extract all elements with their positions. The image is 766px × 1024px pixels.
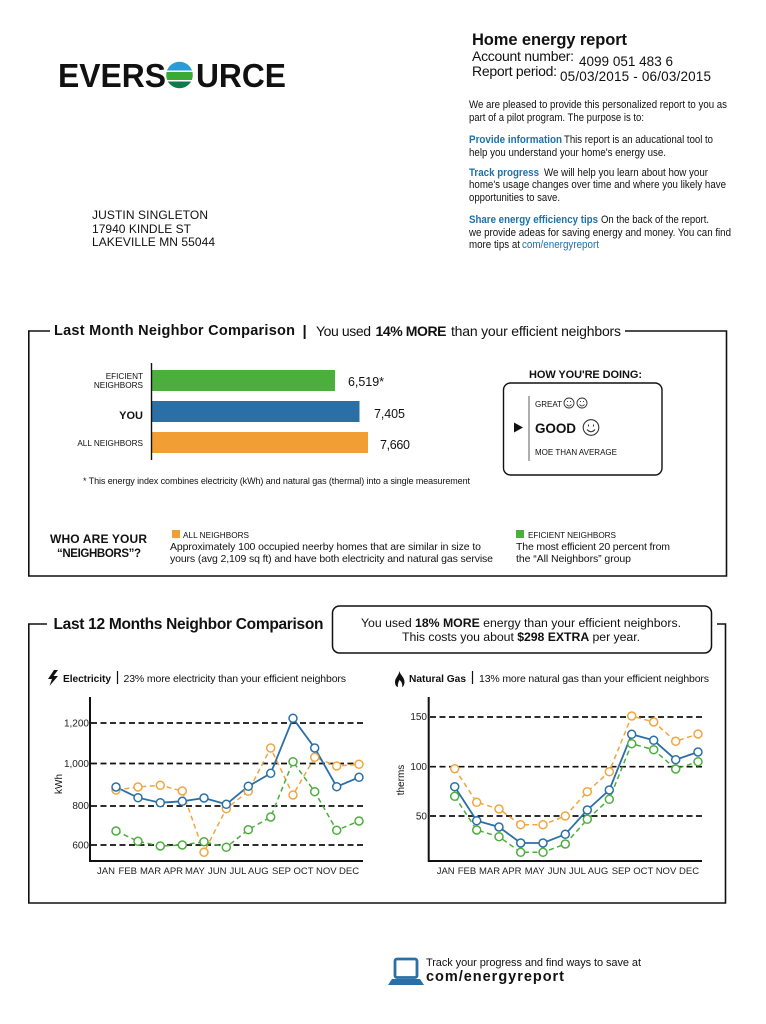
chart: electricity: kWh xyxy=(54,774,65,794)
logo: Eversource: EVERS xyxy=(58,58,166,95)
icon: laptop xyxy=(388,959,424,985)
icon: smileys xyxy=(564,398,599,435)
logo: Eversource xyxy=(60,62,285,88)
bar chart: 7,405 xyxy=(374,407,405,421)
intro text block: part of a pilot program. The purpose is to: xyxy=(469,112,644,124)
chart: natural gas: JUL xyxy=(569,866,586,877)
report header: 05/03/2015 - 06/03/2015 xyxy=(560,69,711,84)
intro text block: home's usage changes over time and where you likely have xyxy=(469,179,726,191)
natural gas heading: Natural Gas xyxy=(409,674,466,685)
electricity heading: 23% more electricity than your efficient neighbors xyxy=(124,673,346,685)
chart: electricity: JUN xyxy=(208,866,227,877)
legend: efficient neighbors: EFICIENT NEIGHBORS xyxy=(528,531,617,540)
footer call to action: Track your progress and find ways to save at xyxy=(426,957,641,969)
chart: natural gas: 150 xyxy=(410,712,427,723)
intro text block: On the back of the report. xyxy=(601,214,709,226)
how you're doing gauge: GREAT xyxy=(535,400,562,409)
customer address: LAKEVILLE MN 55044 xyxy=(92,235,215,249)
how you're doing gauge: HOW YOU'RE DOING: xyxy=(529,369,642,381)
intro text block: we provide adeas for saving energy and money. You can find xyxy=(468,227,731,239)
report header xyxy=(472,31,711,84)
electricity heading: Electricity xyxy=(63,674,111,685)
intro text block: Share energy efficiency tips xyxy=(469,214,598,226)
panel heading: Last Month Neighbor Comparison xyxy=(54,323,295,339)
intro text block: help you understand your home's energy use. xyxy=(469,147,666,159)
icon: lightning bolt xyxy=(48,670,58,686)
panel heading xyxy=(54,323,621,340)
who are your neighbors: “NEIGHBORS”? xyxy=(57,548,141,560)
chart: natural gas: 100 xyxy=(410,762,427,773)
natural gas heading: 13% more natural gas than your efficient neighbors xyxy=(479,673,709,685)
who are your neighbors: WHO ARE YOUR xyxy=(50,532,147,546)
intro text block: opportunities to save. xyxy=(469,192,560,204)
chart: natural gas: SEP xyxy=(612,866,631,877)
customer address: JUSTIN SINGLETON xyxy=(92,208,208,222)
legend: efficient neighbors: the “All Neighbors” group xyxy=(516,553,631,565)
chart: natural gas: AUG xyxy=(588,866,608,877)
chart: electricity: JAN xyxy=(97,866,115,877)
panel: last month neighbor comparison xyxy=(29,323,727,576)
report header: 4099 051 483 6 xyxy=(579,54,673,69)
callout: This costs you about $298 EXTRA per year. xyxy=(402,630,640,644)
chart: natural gas: JAN xyxy=(437,866,455,877)
who are your neighbors xyxy=(50,532,147,560)
intro text block: Track progress xyxy=(469,167,539,179)
bar chart: ALL NEIGHBORS xyxy=(77,439,144,448)
intro text block: This report is an aducational tool to xyxy=(564,134,713,146)
electricity heading xyxy=(48,670,346,686)
logo: Eversource: URCE xyxy=(196,58,286,95)
chart: electricity: 800 xyxy=(72,801,89,812)
bar chart: NEIGHBORS xyxy=(94,381,144,390)
chart: electricity: DEC xyxy=(339,866,359,877)
chart: electricity xyxy=(54,697,363,877)
intro text block: Provide information xyxy=(469,134,562,146)
legend: efficient neighbors xyxy=(516,530,670,565)
bar chart xyxy=(77,363,410,460)
chart: electricity: MAR xyxy=(140,866,161,877)
bar chart: 7,660 xyxy=(380,438,410,452)
legend: all neighbors: Approximately 100 occupied neerby homes that are similar in size to xyxy=(170,541,481,553)
chart: natural gas: FEB xyxy=(458,866,476,877)
panel heading: | xyxy=(302,323,307,340)
report header: Account number: xyxy=(472,48,574,64)
chart: natural gas xyxy=(396,697,702,877)
chart: electricity: AUG xyxy=(248,866,269,877)
panel heading: Last 12 Months Neighbor Comparison xyxy=(54,616,324,633)
legend: all neighbors xyxy=(170,530,493,565)
intro text block: We will help you learn about how your xyxy=(544,167,708,179)
callout: You used 18% MORE energy than your efficient neighbors. xyxy=(361,616,681,630)
panel: last 12 months neighbor comparison xyxy=(29,606,726,903)
footnote: * This energy index combines electricity (kWh) and natural gas (thermal) into a single measurement xyxy=(83,476,470,486)
bar chart: EFICIENT xyxy=(106,372,143,381)
how you're doing gauge: GOOD xyxy=(535,421,576,436)
how you're doing gauge: MOE THAN AVERAGE xyxy=(535,448,617,457)
legend: all neighbors: ALL NEIGHBORS xyxy=(183,531,250,540)
chart: electricity: SEP xyxy=(272,866,291,877)
chart: electricity: NOV xyxy=(316,866,337,877)
chart: natural gas: OCT xyxy=(633,866,654,877)
natural gas heading xyxy=(395,671,709,687)
bar chart: YOU xyxy=(119,410,143,422)
footer call to action: com/energyreport xyxy=(426,969,564,985)
intro text block: We are pleased to provide this personalized report to you as xyxy=(469,99,727,111)
chart: electricity: MAY xyxy=(185,866,206,877)
chart: electricity: JUL xyxy=(230,866,246,877)
chart: natural gas: 50 xyxy=(416,812,427,822)
how you're doing gauge xyxy=(504,369,662,475)
chart: natural gas: APR xyxy=(502,866,522,877)
chart: electricity: 1,000 xyxy=(64,759,89,770)
chart: natural gas: MAR xyxy=(479,866,500,877)
chart: natural gas: DEC xyxy=(679,866,699,877)
report header: Report period: xyxy=(472,63,557,79)
callout xyxy=(332,606,712,653)
panel heading: 14% MORE xyxy=(376,323,446,339)
chart: electricity: OCT xyxy=(294,866,314,877)
chart: electricity: FEB xyxy=(118,866,137,877)
chart: natural gas: NOV xyxy=(656,866,677,877)
footer call to action xyxy=(388,957,641,985)
legend: all neighbors: yours (avg 2,109 sq ft) and have both electricity and natural gas servise xyxy=(170,553,493,565)
customer address: 17940 KINDLE ST xyxy=(92,222,192,236)
intro text block: more tips at xyxy=(469,239,520,251)
customer address xyxy=(92,208,215,249)
report header: Home energy report xyxy=(472,31,628,49)
icon: flame xyxy=(395,671,404,687)
chart: electricity: 600 xyxy=(72,840,89,852)
chart: electricity: 1,200 xyxy=(64,718,89,730)
chart: natural gas: JUN xyxy=(548,866,566,877)
bar chart: 6,519* xyxy=(348,375,384,389)
panel heading: You used xyxy=(316,323,371,339)
chart: electricity: APR xyxy=(164,866,183,877)
legend: efficient neighbors: The most efficient 20 percent from xyxy=(516,541,670,553)
chart: natural gas: MAY xyxy=(525,866,545,877)
panel heading: than your efficient neighbors xyxy=(451,323,621,339)
intro text block: com/energyreport xyxy=(522,239,599,251)
intro text block xyxy=(468,99,731,251)
chart: natural gas: therms xyxy=(396,765,407,795)
